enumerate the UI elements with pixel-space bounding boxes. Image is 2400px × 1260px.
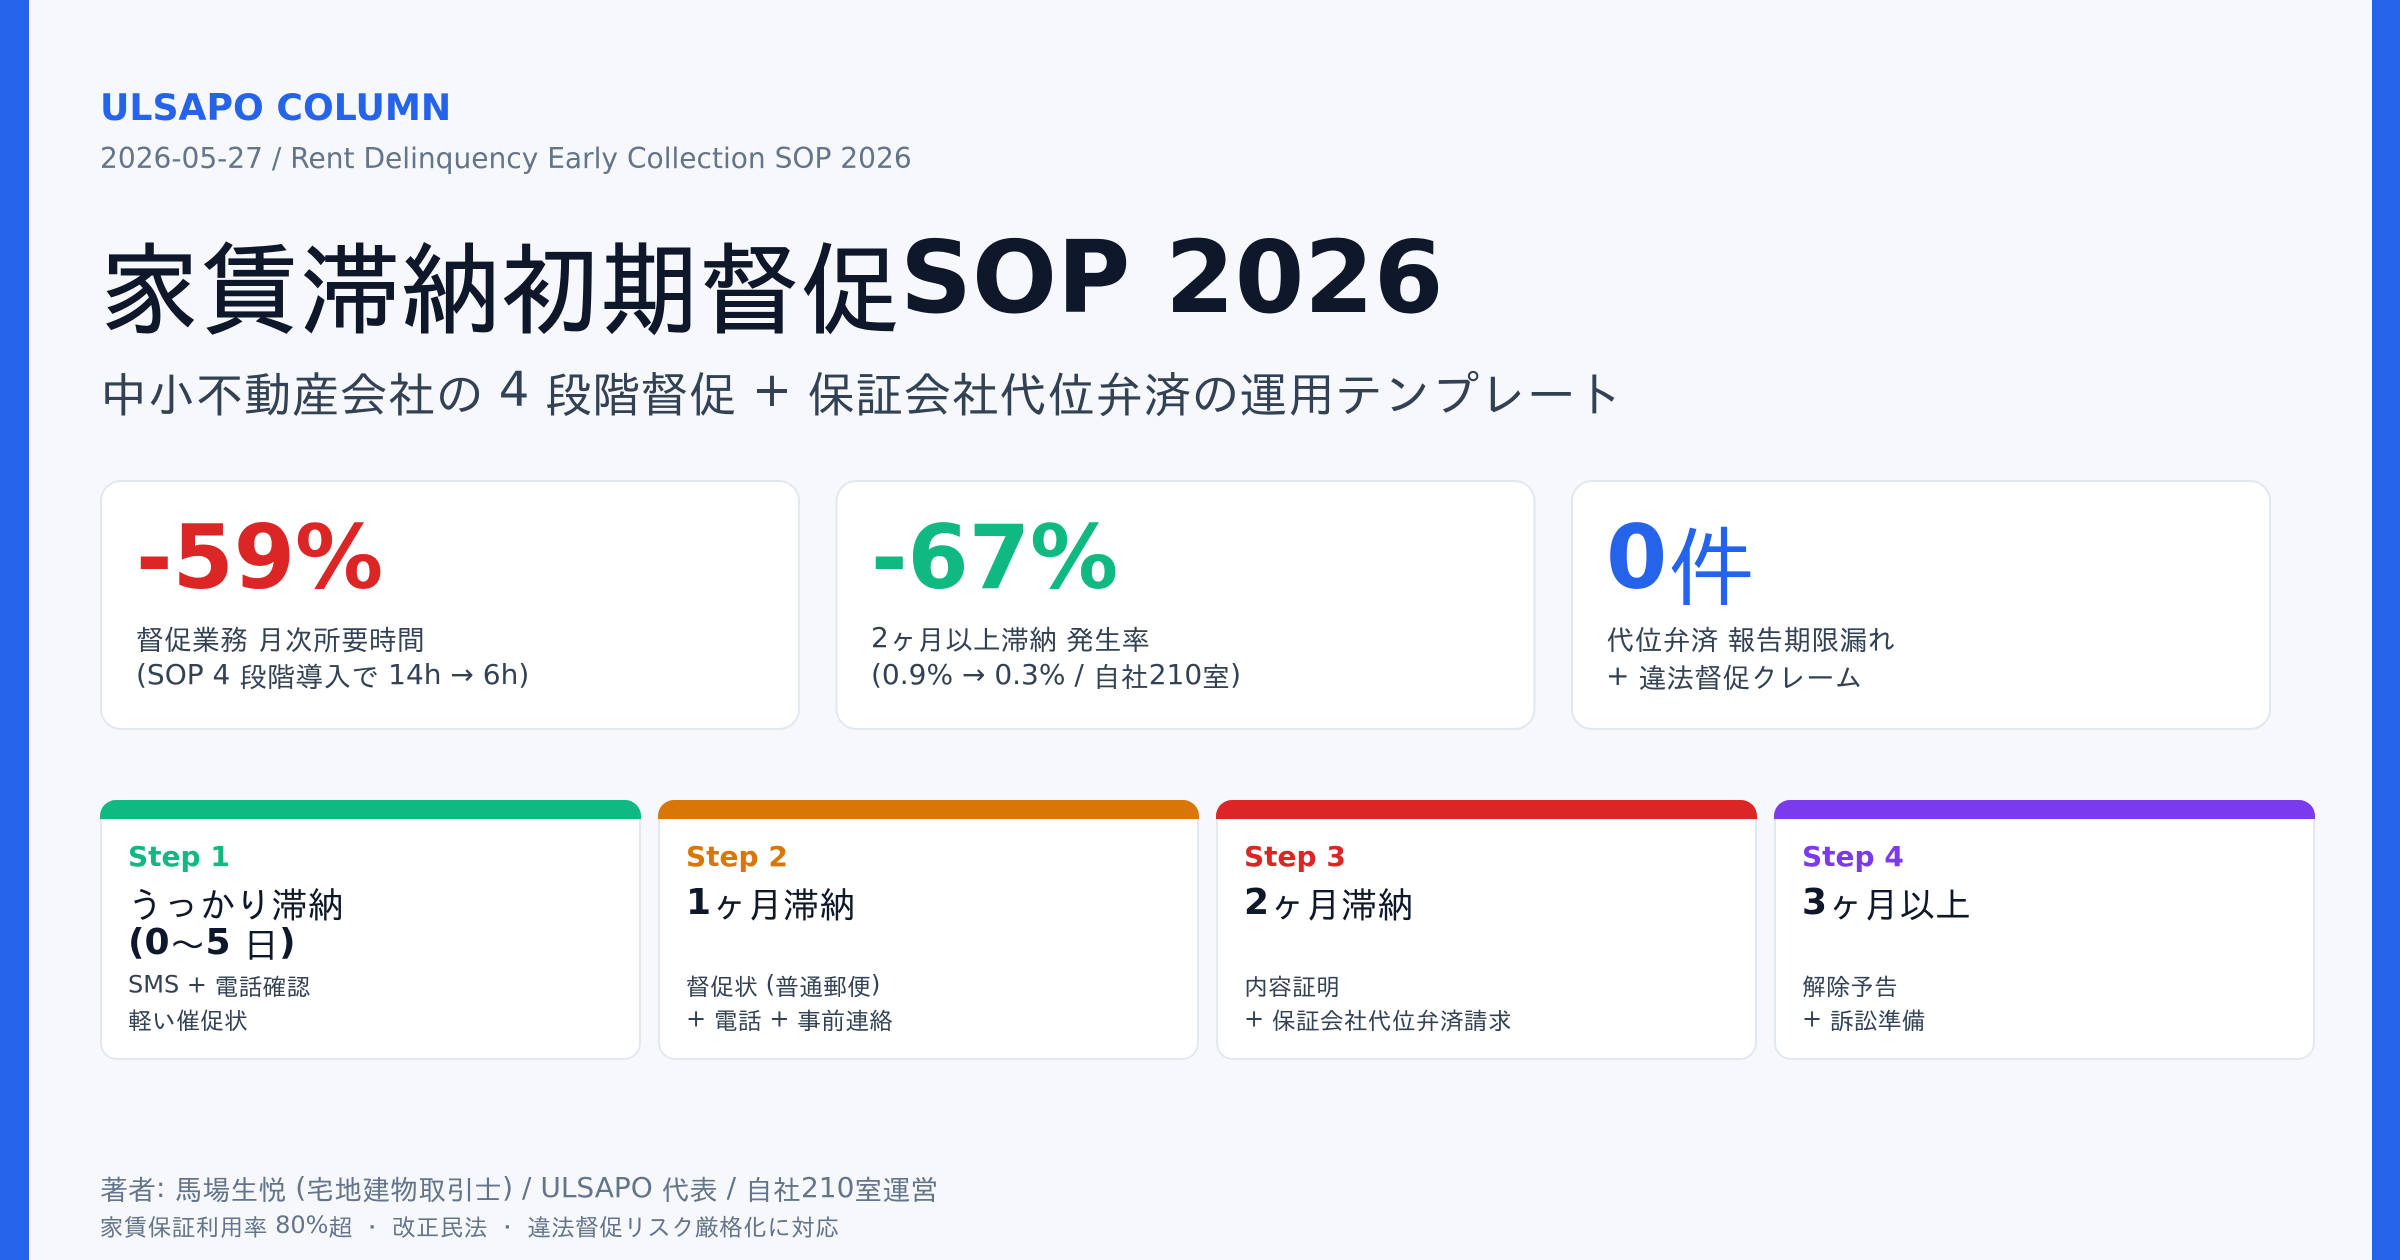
stat description line 2: (0.9% → 0.3% / 自社210室)	[871, 658, 1241, 694]
step 1 description: SMS + 電話確認	[128, 970, 311, 1001]
step 4 title: 3ヶ月以上	[1802, 882, 1971, 927]
step 3 title: 2ヶ月滞納	[1244, 882, 1413, 927]
stat value 0件: 0件	[1606, 506, 1755, 620]
step 2 label: Step 2	[686, 840, 788, 873]
step 4 colour band	[1774, 800, 2315, 819]
step 4 description line 2: + 訴訟準備	[1802, 1004, 1926, 1035]
stat description: 2ヶ月以上滞納 発生率	[871, 621, 1150, 657]
step 2 description: 督促状 (普通郵便)	[686, 970, 880, 1001]
panel: step 1	[100, 800, 641, 1059]
footer author line: 著者: 馬場生悦 (宅地建物取引士) / ULSAPO 代表 / 自社210室運営	[100, 1171, 938, 1207]
stat value -59%: -59%	[136, 506, 383, 609]
step 1 title line 2: (0〜5 日)	[128, 922, 296, 967]
step 3 colour band	[1216, 800, 1757, 819]
stat description line 2: (SOP 4 段階導入で 14h → 6h)	[136, 658, 529, 694]
panel: stat card 1	[101, 481, 799, 729]
footer note: 家賃保証利用率 80%超 ・ 改正民法 ・ 違法督促リスク厳格化に対応	[100, 1211, 839, 1242]
step 1 colour band	[100, 800, 641, 819]
stat description: 代位弁済 報告期限漏れ	[1606, 621, 1895, 657]
date and English subtitle: 2026-05-27 / Rent Delinquency Early Collection SOP 2026	[100, 142, 912, 175]
panel: step 3	[1216, 800, 1757, 1059]
step 1 label: Step 1	[128, 840, 230, 873]
step 1 description line 2: 軽い催促状	[128, 1007, 248, 1035]
step 4 label: Step 4	[1802, 840, 1904, 873]
stat description line 2: + 違法督促クレーム	[1606, 659, 1862, 695]
panel: stat card 2	[836, 481, 1534, 729]
stat description: 督促業務 月次所要時間	[136, 621, 425, 657]
title: 家賃滞納初期督促SOP 2026	[100, 219, 1443, 350]
step 2 description line 2: + 電話 + 事前連絡	[686, 1004, 893, 1035]
stat value -67%: -67%	[871, 506, 1118, 609]
step 1 title: うっかり滞納	[128, 886, 344, 927]
left accent bar	[0, 0, 29, 1260]
panel: step 2	[658, 800, 1199, 1059]
brand label: ULSAPO COLUMN	[100, 86, 451, 129]
step 3 description: 内容証明	[1244, 973, 1340, 1001]
step 2 title: 1ヶ月滞納	[686, 882, 855, 927]
step 3 description line 2: + 保証会社代位弁済請求	[1244, 1004, 1512, 1035]
subtitle: 中小不動産会社の 4 段階督促 + 保証会社代位弁済の運用テンプレート	[100, 362, 1623, 424]
step 2 colour band	[658, 800, 1199, 819]
step 3 label: Step 3	[1244, 840, 1346, 873]
panel: stat card 3	[1572, 481, 2270, 729]
panel: step 4	[1774, 800, 2315, 1059]
step 4 description: 解除予告	[1802, 973, 1898, 1001]
right accent bar	[2372, 0, 2400, 1260]
